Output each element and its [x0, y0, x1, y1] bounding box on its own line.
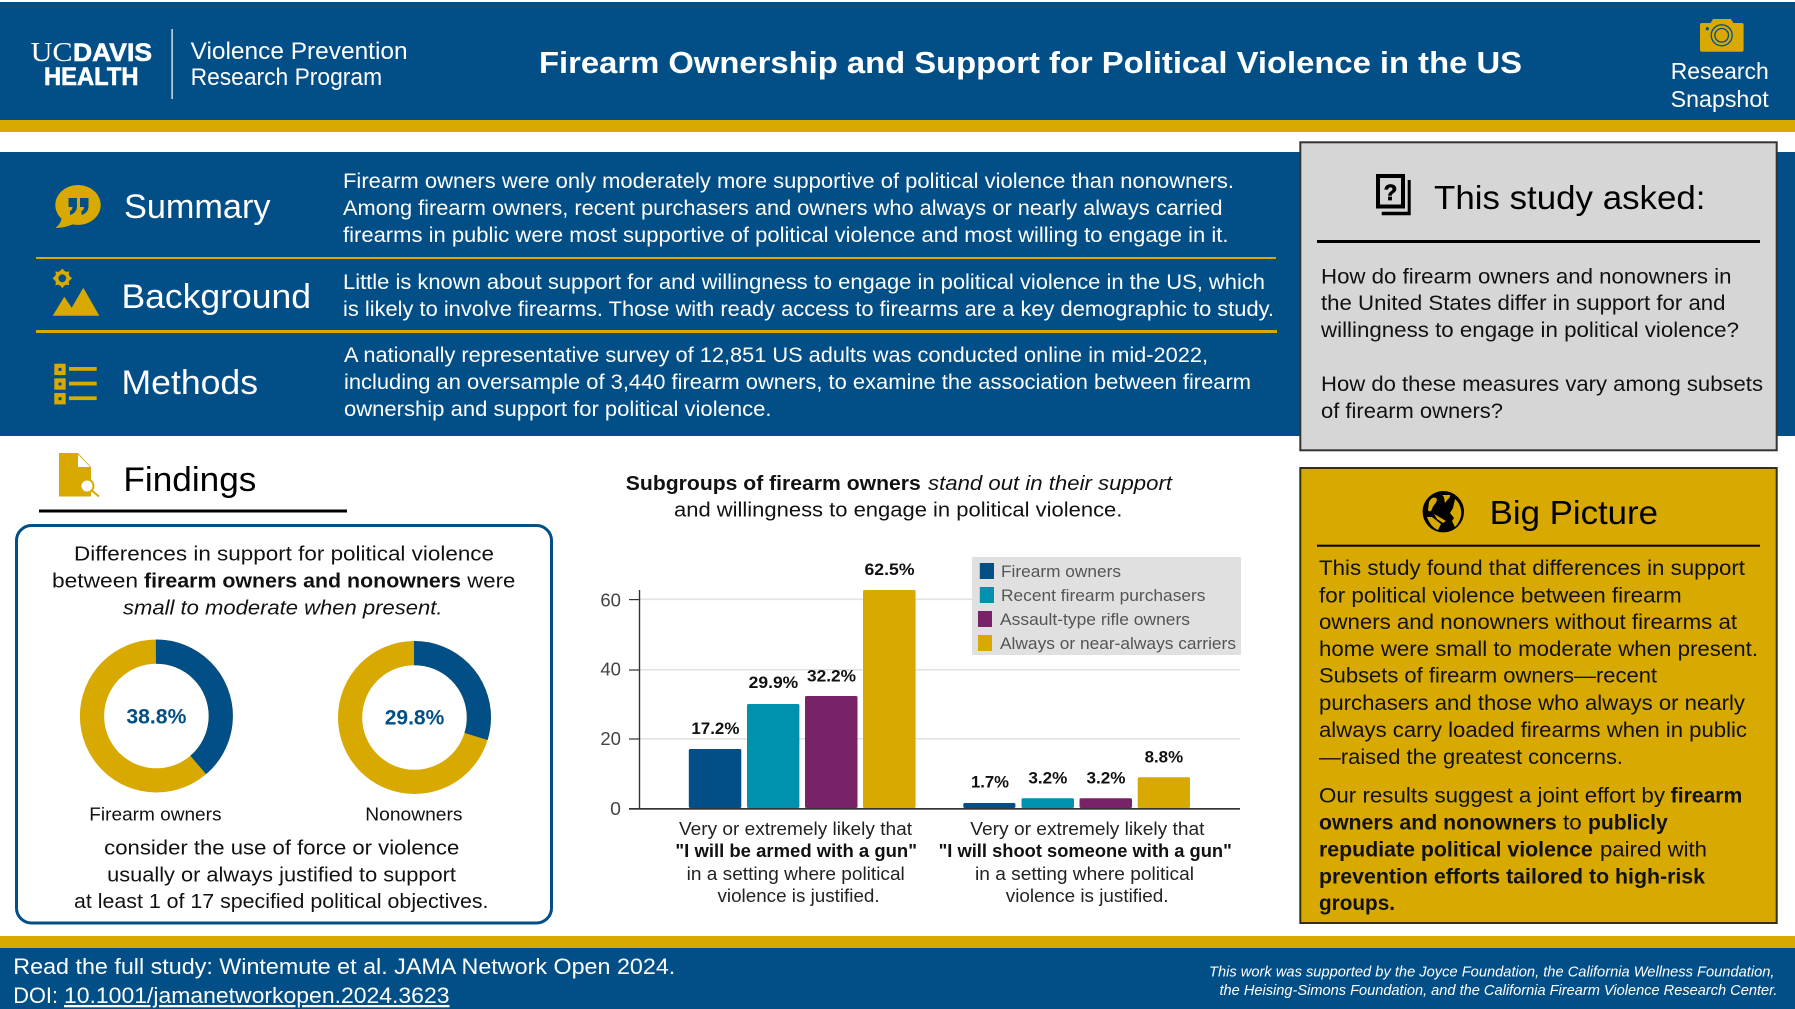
donut panel intro text: Differences in support for political violence — [74, 542, 494, 565]
methods text: including an oversample of 3,440 firearm owners, to examine the association between firearm — [344, 371, 1251, 394]
logo: UC Davis Health: DAVIS — [73, 39, 152, 67]
research snapshot label: Research — [1671, 58, 1769, 84]
chart heading: stand out in their support — [928, 472, 1173, 495]
bar value labels: 17.2% — [691, 719, 739, 738]
x-axis label: shoot someone with a gun: in a setting where political — [975, 864, 1194, 884]
background text: Little is known about support for and willingness to engage in political violence in the US, which — [343, 271, 1265, 294]
big picture text: This study found that differences in support — [1319, 557, 1745, 580]
donut chart: firearm owners 38.8% — [92, 652, 221, 780]
heading: summary: Summary — [124, 188, 270, 226]
label: nonowners: Nonowners — [365, 803, 462, 824]
heading: this study asked: This study asked: — [1434, 179, 1706, 216]
legend: Firearm owners — [1001, 562, 1121, 581]
donut panel closing text: usually or always justified to support — [107, 864, 456, 887]
y axis: 60 — [600, 590, 621, 610]
y axis: 20 — [600, 729, 621, 749]
heading: findings: Findings — [123, 461, 256, 499]
citation and DOI: 10.1001/jamanetworkopen.2024.3623 — [64, 983, 450, 1008]
header banner — [0, 2, 1795, 132]
program name: Research Program — [191, 64, 382, 91]
summary text: firearms in public were most supportive of political violence and most willing to engage in it. — [343, 224, 1228, 247]
icon: camera — [1700, 19, 1744, 52]
chart heading: Subgroups of firearm owners — [626, 472, 921, 495]
big picture text — [1319, 557, 1758, 915]
icon: sun and mountains — [52, 268, 99, 316]
donut chart: firearm owners 38.8%: 38.8% — [126, 706, 187, 729]
legend: Recent firearm purchasers — [1001, 586, 1206, 605]
icon: question document: ? — [1384, 180, 1397, 205]
donut panel intro text: between — [52, 570, 138, 593]
bar value labels: 8.8% — [1145, 748, 1183, 767]
study questions — [1320, 265, 1763, 423]
heading: methods: Methods — [122, 364, 258, 402]
bar value labels: 1.7% — [971, 772, 1009, 792]
logo: UC Davis Health: UC — [31, 37, 73, 67]
big picture text: owners and nonowners — [1319, 811, 1557, 834]
background text: is likely to involve firearms. Those with ready access to firearms are a key demographic to study. — [343, 298, 1274, 321]
bar value labels: 3.2% — [1086, 769, 1126, 788]
x-axis label: armed with a gun: in a setting where political — [687, 864, 905, 884]
study questions: How do these measures vary among subsets — [1321, 373, 1763, 396]
donut panel intro text: were — [466, 570, 515, 593]
panel: this study asked — [1300, 142, 1777, 450]
panel: owners vs nonowners donuts — [16, 526, 552, 923]
background text — [343, 271, 1274, 321]
footer — [0, 936, 1795, 1009]
big picture text: to — [1563, 811, 1582, 834]
program name: Violence Prevention — [191, 38, 408, 65]
study questions: How do firearm owners and nonowners in — [1321, 265, 1732, 288]
summary text: Firearm owners were only moderately more supportive of political violence than nonowners. — [343, 170, 1234, 193]
big picture text: groups. — [1319, 892, 1395, 915]
label: firearm owners: Firearm owners — [89, 803, 222, 824]
funding note: the Heising-Simons Foundation, and the California Firearm Violence Research Center. — [1220, 983, 1778, 999]
legend: Always or near-always carriers — [1000, 634, 1236, 653]
big picture text: owners and nonowners without firearms at — [1319, 611, 1737, 634]
big picture text: Our results suggest a joint effort by — [1319, 784, 1666, 807]
methods text: ownership and support for political violence. — [344, 398, 772, 421]
icon: document with magnifier — [59, 453, 99, 496]
citation and DOI: DOI: — [13, 983, 58, 1008]
chart heading — [626, 472, 1173, 522]
x-axis label: armed with a gun: Very or extremely likely that — [679, 819, 912, 839]
donut chart: nonowners 29.8% — [350, 653, 479, 782]
gridlines — [640, 598, 1240, 740]
summary text: Among firearm owners, recent purchasers and owners who always or nearly always carried — [343, 197, 1222, 220]
heading: background: Background — [122, 278, 311, 316]
bar value labels: 3.2% — [1028, 769, 1067, 788]
big picture text: —raised the greatest concerns. — [1319, 746, 1623, 769]
panel: big picture — [1300, 468, 1777, 923]
bars: armed with a gun — [689, 590, 916, 808]
big picture text: paired with — [1600, 839, 1707, 862]
big picture text: home were small to moderate when present. — [1319, 638, 1758, 661]
study questions: of firearm owners? — [1321, 400, 1503, 423]
research snapshot label: Snapshot — [1671, 86, 1769, 112]
summary text — [343, 170, 1234, 247]
legend — [972, 557, 1241, 655]
big picture text: purchasers and those who always or nearly — [1319, 692, 1746, 715]
title: Firearm Ownership and Support for Political Violence in the US — [539, 46, 1522, 80]
x-axis label: shoot someone with a gun: violence is justified. — [1006, 886, 1168, 906]
x-axis label: shoot someone with a gun: Very or extremely likely that — [970, 819, 1204, 839]
bar value labels: 62.5% — [864, 560, 914, 579]
heading: big picture: Big Picture — [1490, 494, 1658, 531]
big picture text: for political violence between firearm — [1319, 584, 1682, 607]
methods text — [344, 344, 1251, 421]
donut panel intro text: small to moderate when present. — [123, 597, 442, 620]
bar chart — [600, 557, 1241, 906]
icon: speech bubble — [55, 185, 101, 228]
y axis: 0 — [610, 799, 621, 819]
donut panel closing text: consider the use of force or violence — [104, 837, 459, 860]
findings heading — [39, 453, 347, 512]
legend: Assault-type rifle owners — [1000, 610, 1190, 629]
bars: shoot someone with a gun — [963, 777, 1190, 808]
donut panel intro text: firearm owners and nonowners — [144, 570, 461, 593]
donut panel closing text — [74, 837, 488, 913]
research snapshot label — [1671, 58, 1769, 112]
x-axis label: armed with a gun: "I will be armed with a gun" — [675, 841, 917, 861]
citation and DOI — [13, 954, 675, 1008]
study questions: the United States differ in support for and — [1321, 292, 1726, 315]
y axis: 40 — [600, 660, 621, 680]
donut chart: nonowners 29.8%: 29.8% — [385, 707, 445, 730]
icon: globe — [1423, 491, 1464, 532]
funding note: This work was supported by the Joyce Foundation, the California Wellness Foundation, — [1209, 965, 1774, 981]
study questions: willingness to engage in political violence? — [1320, 319, 1739, 342]
citation and DOI: Read the full study: Wintemute et al. JAMA Network Open 2024. — [13, 954, 675, 979]
big picture text: always carry loaded firearms when in public — [1319, 719, 1747, 742]
x-axis label: armed with a gun: violence is justified. — [718, 886, 880, 906]
big picture text: Subsets of firearm owners—recent — [1319, 665, 1657, 688]
icon: checklist — [54, 364, 97, 404]
big picture text: publicly — [1588, 811, 1668, 834]
x-axis label: armed with a gun — [675, 819, 917, 906]
panel: summary, background, methods — [0, 152, 1795, 436]
program name — [191, 38, 408, 91]
logo: UC Davis Health: HEALTH — [44, 63, 138, 91]
bar value labels: 32.2% — [807, 666, 856, 686]
big picture text: firearm — [1671, 784, 1742, 807]
logo: UC Davis Health — [31, 29, 173, 99]
donut panel closing text: at least 1 of 17 specified political objectives. — [74, 890, 488, 913]
chart heading: and willingness to engage in political violence. — [674, 499, 1122, 522]
big picture text: repudiate political violence — [1319, 839, 1593, 862]
methods text: A nationally representative survey of 12,851 US adults was conducted online in mid-2022, — [344, 344, 1208, 367]
x-axis label: shoot someone with a gun — [939, 819, 1232, 906]
big picture text: prevention efforts tailored to high-risk — [1319, 865, 1705, 888]
donut panel intro text — [52, 542, 515, 620]
y axis — [600, 590, 1240, 819]
x-axis label: shoot someone with a gun: "I will shoot someone with a gun" — [939, 841, 1232, 861]
icon: question document — [1378, 176, 1411, 215]
bar value labels: 29.9% — [749, 673, 798, 692]
bar value labels — [691, 560, 1183, 792]
funding note — [1209, 965, 1778, 999]
